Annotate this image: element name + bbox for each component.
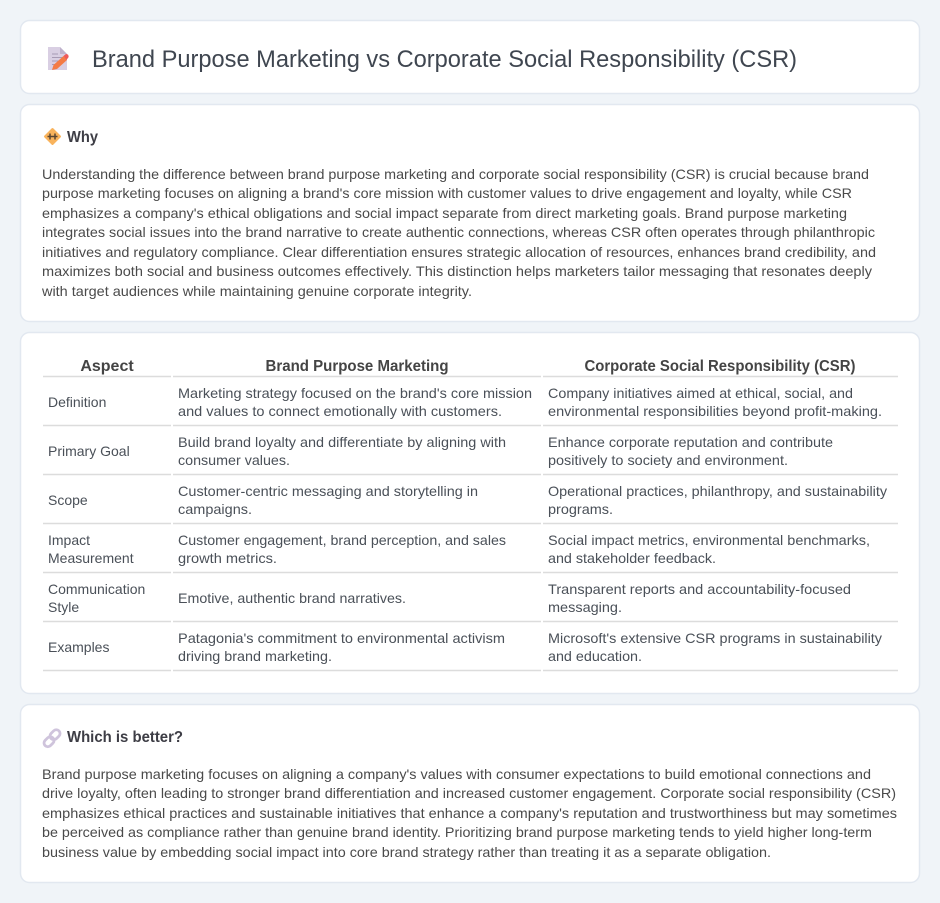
row: primary goal: positively to society and environment. <box>548 452 788 468</box>
row: primary goal: consumer values. <box>178 452 290 468</box>
text block: verdict: be perceived as compliance rather than genuine brand identity. Prioritizing brand purpose marketing tends to yield higher long-term <box>42 824 872 840</box>
row: examples: Examples <box>48 639 109 655</box>
panel: comparison table <box>20 332 920 694</box>
row: impact measurement <box>48 532 870 566</box>
row: impact measurement: growth metrics. <box>178 550 277 566</box>
row: communication style: Transparent reports and accountability-focused <box>548 581 851 597</box>
text block: why explanation <box>41 166 876 299</box>
row: scope: programs. <box>548 501 613 517</box>
row: primary goal: Primary Goal <box>48 443 130 459</box>
text block: why explanation: purpose marketing focuses on aligning a brand's core mission with customer values to drive engagement and loyalty, while CSR <box>42 185 852 201</box>
table header <box>80 358 856 375</box>
table header: Aspect <box>80 358 134 375</box>
text block: why explanation: Understanding the difference between brand purpose marketing and corporate social responsibility (CSR) is crucial because brand <box>42 166 869 182</box>
heading: why: Why <box>67 129 98 146</box>
row: communication style: Style <box>48 599 79 615</box>
row: examples: Microsoft's extensive CSR programs in sustainability <box>548 630 882 646</box>
row: primary goal: Build brand loyalty and differentiate by aligning with <box>178 434 506 450</box>
row: communication style: messaging. <box>548 599 622 615</box>
text block: why explanation: maximizes both social and business outcomes effectively. This distinction helps marketers tailor messaging that resonates deeply <box>42 263 872 279</box>
row: communication style: Emotive, authentic brand narratives. <box>178 590 406 606</box>
row: scope: Scope <box>48 492 88 508</box>
heading: which is better: Which is better? <box>67 729 183 746</box>
text block: verdict: Brand purpose marketing focuses on aligning a company's values with consumer expectations to build emotional connections and <box>42 766 871 782</box>
row: communication style <box>48 581 851 615</box>
row: examples: and education. <box>548 648 642 664</box>
row: primary goal <box>48 434 833 468</box>
row: scope <box>48 483 887 517</box>
row: scope: campaigns. <box>178 501 252 517</box>
row: definition <box>48 385 882 419</box>
text block: verdict <box>42 766 897 860</box>
row: primary goal: Enhance corporate reputation and contribute <box>548 434 833 450</box>
row: scope: Customer-centric messaging and storytelling in <box>178 483 478 499</box>
icon: document with pencil <box>48 47 69 70</box>
panel: title header <box>20 20 920 94</box>
row: examples <box>48 630 882 664</box>
icon: chain link <box>42 728 62 748</box>
title: Brand Purpose Marketing vs Corporate Social Responsibility (CSR) <box>92 46 797 73</box>
icon: warning diamond <box>45 129 60 144</box>
row: definition: and values to connect emotionally with customers. <box>178 403 502 419</box>
row: impact measurement: Customer engagement, brand perception, and sales <box>178 532 506 548</box>
row: definition: Definition <box>48 394 106 410</box>
table header: Brand Purpose Marketing <box>266 358 448 375</box>
text block: why explanation: emphasizes a company's ethical obligations and social impact separate from direct marketing goals. Brand purpose marketing <box>42 205 847 221</box>
text block: why explanation: with target audiences while maintaining genuine corporate integrity. <box>41 283 472 299</box>
text block: verdict: drive loyalty, often leading to stronger brand differentiation and increased customer engagement. Corporate social responsibility (CSR) <box>42 785 896 801</box>
row: communication style: Communication <box>48 581 145 597</box>
text block: why explanation: initiatives and regulatory compliance. Clear differentiation ensures strategic allocation of resources, enhances brand credibility, and <box>42 244 876 260</box>
row: impact measurement: Measurement <box>48 550 134 566</box>
row: scope: Operational practices, philanthropy, and sustainability <box>548 483 887 499</box>
row: impact measurement: and stakeholder feedback. <box>548 550 716 566</box>
row: impact measurement: Social impact metrics, environmental benchmarks, <box>548 532 870 548</box>
text block: why explanation: integrates social issues into the brand narrative to create authentic connections, whereas CSR often operates through philanthropic <box>42 224 875 240</box>
row: definition: Company initiatives aimed at ethical, social, and <box>548 385 853 401</box>
row: examples: driving brand marketing. <box>178 648 332 664</box>
text block: verdict: business value by embedding social impact into core brand strategy rather than treating it as a separate obligation. <box>42 844 771 860</box>
table header: Corporate Social Responsibility (CSR) <box>584 358 856 375</box>
panel: why <box>20 104 920 322</box>
row: impact measurement: Impact <box>48 532 90 548</box>
row: examples: Patagonia's commitment to environmental activism <box>178 630 505 646</box>
row: definition: environmental responsibilities beyond profit-making. <box>548 403 882 419</box>
row: definition: Marketing strategy focused on the brand's core mission <box>178 385 532 401</box>
panel: which is better <box>20 704 920 882</box>
text block: verdict: emphasizes ethical practices and sustainable initiatives that enhance a company's reputation and trustworthiness but may sometimes <box>42 805 897 821</box>
